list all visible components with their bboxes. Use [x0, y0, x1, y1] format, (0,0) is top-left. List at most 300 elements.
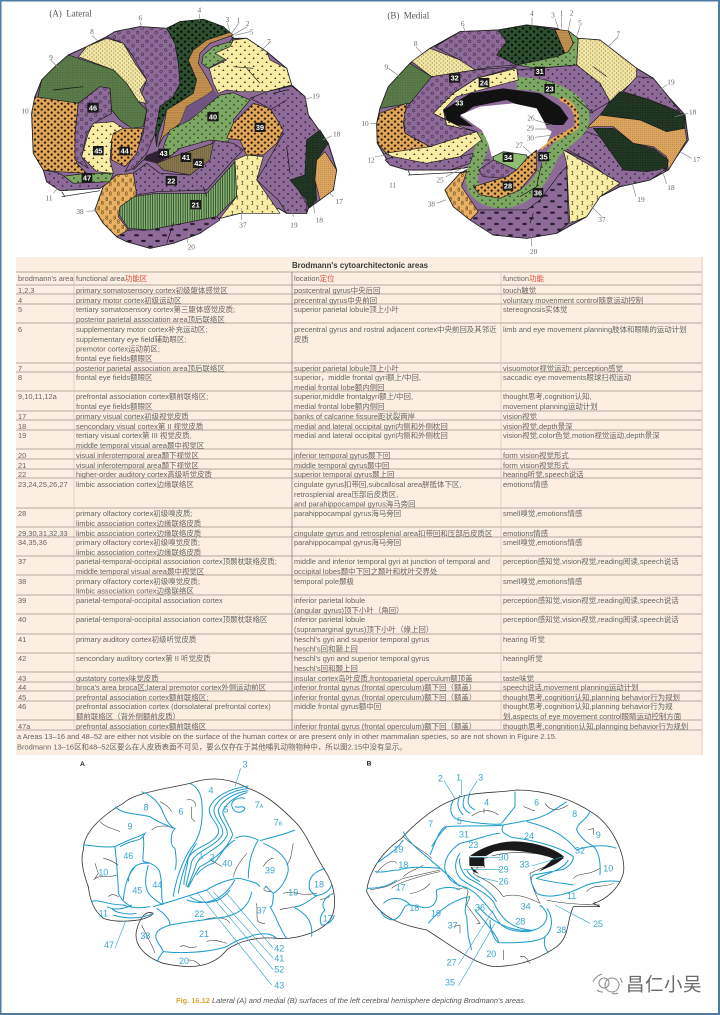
silhouette base — [377, 25, 688, 238]
area number labels: 10 — [98, 867, 108, 877]
area number labels — [21, 6, 343, 251]
header row: brodmann's area — [18, 274, 74, 283]
header row: location定位 — [294, 273, 335, 283]
table rows: prefrontal association cortex额前联络区 — [76, 721, 207, 731]
area number labels: 4 — [208, 786, 213, 796]
table rows: vision视觉,color色觉,motion视觉运动,depth景深 — [503, 430, 660, 440]
area number labels: 20 — [530, 247, 538, 256]
figure caption: Fig. 16.12 Lateral (A) and medial (B) surfaces of the left cerebral hemisphere depicting Brodmann's areas. — [176, 996, 526, 1005]
area number labels: 6 — [138, 14, 142, 23]
area number labels: 7B — [274, 818, 283, 828]
table footnote: Brodmann 13–16区和48–52区要么在人皮质表面不可见，要么仅存在于其他哺乳动物物种中，所以图2.15中没有显示。 — [17, 742, 407, 752]
table rows: inferior frontal gyrus (frontal operculum)额下回（额盖） — [294, 721, 476, 731]
area number labels: 10 — [361, 119, 369, 128]
region 18 upper — [600, 92, 685, 132]
numbered boxes — [449, 67, 555, 197]
table rows: 40 — [18, 615, 26, 624]
area number labels: 22 — [194, 909, 204, 919]
table rows: parietal-temporal-occipital association cortex — [76, 596, 223, 605]
region 10 — [377, 103, 430, 153]
region 11 — [385, 153, 473, 170]
table rows: supplementary eye field辅助眼区; — [76, 334, 186, 344]
sulci — [408, 67, 607, 223]
table rows: parahippocampal gyrus海马旁回 — [294, 508, 401, 518]
region 40 — [163, 93, 250, 157]
area number labels: 31 — [459, 829, 469, 839]
area number labels: 4 — [484, 798, 489, 808]
region 4 — [155, 19, 230, 147]
region 43 — [143, 150, 170, 163]
area number labels: 37 — [257, 906, 267, 916]
silhouette base — [32, 19, 337, 248]
region 24 — [433, 68, 518, 132]
area number labels: 38 — [428, 200, 435, 209]
table: Brodmann's cytoarchitectonic areas — [16, 257, 703, 755]
table rows: emotions情感 — [503, 479, 549, 489]
area number labels: 8 — [90, 27, 94, 36]
table rows: temporal pole颞极 — [294, 576, 355, 586]
region 8 — [78, 38, 147, 103]
table rows: visual inferotemporal area颞下视觉区 — [76, 460, 199, 470]
region 18 lower — [593, 128, 668, 172]
table rows: visuomotor视觉运动; perception感觉 — [503, 363, 623, 373]
central white cavity — [473, 853, 563, 903]
area number labels: 17 — [323, 913, 333, 923]
area number labels: 20 — [188, 242, 195, 251]
numbered boxes: 23 — [546, 84, 554, 93]
area number labels: 19 — [312, 92, 320, 101]
table title: Brodmann's cytoarchitectonic areas — [292, 261, 429, 270]
white callosum details — [463, 857, 493, 867]
table rows: supplementary motor cortex补充运动区; — [76, 324, 207, 334]
numbered boxes: 43 — [160, 149, 168, 158]
table rows: heschl's回和颞上回 — [294, 644, 358, 654]
table rows: 22 — [18, 470, 26, 479]
area number labels: 2 — [246, 19, 250, 28]
table rows: 18 — [18, 422, 26, 431]
region 37 — [563, 150, 620, 223]
table rows: middle and inferior temporal gyri at junction of temporal and — [294, 557, 490, 566]
numbered boxes: 42 — [194, 159, 202, 168]
region 9 — [38, 55, 147, 128]
table rows: prefrontal association cortex额前联络区; — [76, 391, 208, 401]
area number labels: 39 — [265, 866, 275, 876]
table rows: 20 — [18, 451, 26, 460]
area number labels: 18 — [333, 130, 341, 139]
table rows: medial frontal lobe额内侧回 — [294, 401, 385, 411]
area number labels: 26 — [527, 114, 535, 123]
area number labels: 18 — [314, 879, 324, 889]
region 18 — [290, 130, 328, 208]
area number labels: 3 — [478, 773, 483, 783]
table rows: superior,middle frontalgyri额上/中回, — [294, 391, 413, 401]
header row: functional area功能区 — [76, 273, 148, 283]
table rows: limbic association cortex边缘联络区 — [76, 586, 194, 596]
table rows: primary visual cortex初级视觉皮质 — [76, 411, 189, 421]
area number labels: 38 — [76, 207, 84, 216]
region 5 — [517, 31, 578, 68]
panel letter B: B — [367, 761, 372, 768]
table rows: middle temporal gyrus颞中回 — [294, 460, 389, 470]
table rows: primary olfactory cortex初级嗅觉皮质; — [76, 576, 200, 586]
numbered boxes: 36 — [534, 188, 542, 197]
table rows: parietal-temporal-occipital association cortex顶颞枕联络区 — [76, 614, 268, 624]
table rows: 42 — [18, 654, 26, 663]
table rows: 9,10,11,12a — [18, 392, 58, 401]
table rows: 5 — [18, 305, 22, 314]
region 44 — [112, 128, 143, 167]
table rows: inferior parietal lobule — [294, 615, 365, 624]
table rows: vision视觉,depth景深 — [503, 421, 573, 431]
area number labels: 33 — [519, 859, 529, 869]
area number labels: 1 — [560, 8, 564, 17]
region 19 upper — [623, 77, 680, 112]
table rows: 19 — [18, 431, 26, 440]
area number labels: 5 — [457, 816, 462, 826]
cingulate green band — [472, 83, 583, 202]
table rows: prefrontal association cortex额前联络区; — [76, 692, 208, 702]
region 34 — [493, 152, 528, 170]
table rows: smell嗅觉,emotions情感 — [503, 576, 583, 586]
header row — [18, 273, 544, 283]
table rows: gustatory cortex味觉皮质 — [76, 673, 159, 683]
table rows: premotor cortex运动前区; — [76, 344, 160, 354]
area number labels: 36 — [475, 902, 485, 912]
table footnote: a Areas 13–16 and 48–52 are either not visible on the surface of the human cortex or are present only in other mammalian species, so are not shown in Figure 2.15. — [17, 732, 557, 741]
area number labels: 35 — [445, 978, 455, 988]
table rows: 43 — [18, 674, 26, 683]
table rows: inferior parietal lobule — [294, 596, 365, 605]
table rows: hearing听觉,speech说话 — [503, 469, 584, 479]
region 9 — [380, 63, 432, 108]
table rows: hearing听觉 — [503, 653, 543, 663]
area number labels: 3 — [551, 10, 555, 19]
area number labels: 6 — [534, 798, 539, 808]
area leader lines — [370, 17, 692, 247]
area number labels: 8 — [414, 39, 418, 48]
region 38 — [445, 172, 478, 220]
brain diagram B: coloured medial surface — [361, 8, 701, 256]
table rows: medial frontal lobe额内侧回 — [294, 382, 385, 392]
area number labels: 38 — [140, 931, 150, 941]
area number labels: 1 — [237, 16, 241, 25]
area number labels: 7 — [616, 30, 620, 39]
area number labels: 25 — [593, 919, 603, 929]
table rows: primary auditory cortex初级听觉皮质 — [76, 634, 197, 644]
table rows: primary motor cortex初级运动区 — [76, 295, 182, 305]
numbered boxes: 24 — [480, 78, 489, 87]
white central cavity — [460, 103, 552, 157]
table rows: sencondary visual cortex第 II 视觉皮质 — [76, 421, 204, 431]
corpus callosum — [469, 841, 564, 874]
table rows: 46 — [18, 702, 26, 711]
region 6 — [435, 30, 517, 70]
sulcal branches — [93, 800, 330, 965]
numbered boxes: 45 — [94, 146, 102, 155]
area number labels: 10 — [603, 864, 613, 874]
brain outline — [82, 779, 335, 967]
table rows: heschl's gyri and superior temporal gyrus — [294, 654, 430, 663]
table rows: 28 — [18, 509, 26, 518]
table rows: 38 — [18, 577, 26, 586]
header row: function功能 — [503, 273, 544, 283]
table rows: smell嗅觉,emotions情感 — [503, 508, 583, 518]
area number labels: 32 — [575, 846, 585, 856]
region 21 — [118, 162, 237, 230]
table rows: 1,2,3 — [18, 286, 35, 295]
table rows: movement planning运动计划 — [503, 401, 598, 411]
region 10 — [32, 97, 87, 173]
leader lines — [115, 768, 273, 985]
area number labels: 46 — [123, 851, 133, 861]
table rows: retrosplenial area压部后皮质区, — [294, 489, 398, 499]
table rows: visual inferotemporal area颞下视觉区 — [76, 450, 199, 460]
region 20 — [470, 167, 568, 238]
numbered boxes: 32 — [451, 74, 459, 83]
area number labels: 9 — [127, 822, 132, 832]
table rows: banks of calcarine fissure距状裂两岸 — [294, 411, 416, 421]
table rows: medial and lateral occipital gyri内侧和外侧枕回 — [294, 430, 448, 440]
sulcal branches — [370, 803, 613, 963]
area number labels: 7A — [255, 800, 264, 810]
numbered boxes: 33 — [455, 98, 463, 107]
table rows: form vision视觉形式 — [503, 450, 569, 460]
table rows: inferior frontal gyrus (frontal operculum)额下回（额盖） — [294, 692, 476, 702]
table rows: 44 — [18, 683, 26, 692]
area number labels: 19 — [667, 78, 675, 87]
area number labels: 19 — [290, 220, 298, 229]
area number labels: 11 — [45, 194, 53, 203]
table rows: thought思考,cognition认知,planning behavior行为规 — [503, 701, 673, 711]
table rows: 皮质 — [294, 334, 309, 344]
area number labels: 4 — [197, 6, 201, 15]
numbered boxes — [82, 103, 265, 209]
table rows: 37 — [18, 557, 26, 566]
table rows: limbic association cortex边缘联络皮质 — [76, 547, 202, 557]
table rows: stereognosis实体觉 — [503, 304, 568, 314]
area number labels: 19 — [637, 195, 645, 204]
table rows: primary olfactory cortex初级嗅皮质; — [76, 508, 193, 518]
area number labels: 4 — [530, 9, 534, 18]
area number labels: 20 — [179, 956, 189, 966]
table rows: taste味觉 — [503, 673, 535, 683]
table rows: 45 — [18, 693, 26, 702]
table rows — [18, 285, 688, 731]
numbered boxes: 46 — [89, 103, 97, 112]
table rows: emotions情感 — [503, 528, 549, 538]
region 4 — [497, 25, 565, 65]
area number labels: 10 — [21, 106, 29, 115]
table rows: precentral gyrus and rostral adjacent cortex中央前回及其邻近 — [294, 324, 497, 334]
region 22 — [133, 140, 243, 195]
area number labels: 9 — [596, 830, 601, 840]
table rows: frontal eye fields额眼区 — [76, 353, 153, 363]
area number labels: 20 — [486, 949, 496, 959]
table background — [16, 257, 703, 755]
region 3 1 2 — [555, 29, 573, 53]
table rows: smell嗅觉,emotions情感 — [503, 537, 583, 547]
table rows: heschl's回和颞上回 — [294, 664, 358, 673]
area number labels: 29 — [499, 864, 509, 874]
area number labels: 18 — [409, 903, 419, 913]
blue area borders — [83, 783, 334, 962]
region 31 — [517, 65, 610, 113]
area number labels: 1 — [198, 850, 203, 860]
area leader lines — [31, 14, 333, 243]
area number labels: 3 — [242, 759, 247, 769]
region 19 lower — [565, 132, 667, 187]
table rows: thought思考,cognition认知,planning behavior行为规划 — [503, 692, 680, 702]
table rows: cingulate gyrus扣带回,subcallosal area胼胝体下区, — [294, 479, 461, 489]
region 28 — [473, 150, 537, 198]
area number labels: 24 — [524, 831, 534, 841]
table rules — [16, 272, 702, 730]
table rows: frontal eye fields额眼区 — [76, 372, 153, 382]
numbered boxes: 41 — [182, 153, 190, 162]
region 46 — [75, 87, 112, 168]
region 5 — [202, 37, 233, 68]
area number labels: 3 — [225, 15, 229, 24]
table rows: 4 — [18, 296, 22, 305]
area number labels: 12 — [367, 156, 375, 165]
table rows: (supramarginal gyrus)顶下小叶（缘上回） — [294, 624, 433, 634]
table rows: vision视觉 — [503, 411, 537, 421]
table rows: 21 — [18, 461, 26, 470]
region 12 — [385, 132, 482, 163]
table rows: middle temporal visual area颞中视觉区 — [76, 440, 205, 450]
table rows: middle frontal gyrus额中回 — [294, 701, 381, 711]
table rows: 8 — [18, 373, 22, 382]
table rows: voluntary movenment control随意运动控制 — [503, 295, 643, 305]
area number labels: 2 — [438, 773, 443, 783]
region 34 purple — [478, 160, 517, 178]
region 45 — [82, 122, 123, 173]
region 17 — [315, 152, 337, 200]
region 8 — [412, 48, 475, 77]
table rows: limbic association cortex边缘联络皮质 — [76, 528, 202, 538]
retrosplenial orange band — [540, 98, 577, 148]
area number labels: 44 — [152, 880, 162, 890]
table rows: parietal-temporal-occipital association cortex顶颞枕联络皮质; — [76, 556, 277, 566]
table rows: 23,24,25,26,27 — [18, 480, 68, 489]
area number labels: 7 — [428, 819, 433, 829]
area number labels: 5 — [250, 28, 254, 37]
table rows: form vision视觉形式 — [503, 460, 569, 470]
table rows: higher-order auditory cortex高级听觉皮质 — [76, 469, 213, 479]
table rows: touch触觉 — [503, 285, 537, 295]
numbered boxes: 28 — [504, 182, 512, 191]
area number labels: 17 — [396, 883, 406, 893]
region 38 — [95, 173, 137, 237]
table rows: perception感知觉,vision视觉,reading阅读,speech说话 — [503, 556, 679, 566]
region 39 — [227, 103, 283, 155]
area number labels: 19 — [431, 908, 441, 918]
area number labels: 11 — [567, 891, 576, 901]
table rows: prefrontal association cortex (dorsolateral prefrontal cortex) — [76, 702, 271, 711]
area number labels: 2 — [570, 8, 574, 17]
area number labels: 9 — [49, 53, 53, 62]
table rows: (angular gyrus)顶下小叶（角回） — [294, 605, 404, 615]
area number labels — [361, 8, 701, 256]
panel letter A: A — [80, 761, 85, 768]
numbered boxes: 31 — [536, 67, 544, 76]
area number labels: 34 — [521, 902, 531, 912]
table rows: 39 — [18, 596, 26, 605]
numbered boxes: 21 — [192, 200, 200, 209]
numbered boxes: 34 — [504, 153, 513, 162]
area number labels: 19 — [393, 844, 403, 854]
table rows: thougth思考,congnition认知,plannging behavior行为规划 — [503, 721, 688, 731]
table rows: heschl's gyri and superior temporal gyrus — [294, 635, 430, 644]
table rows: 7 — [18, 364, 22, 373]
area number labels: 23 — [468, 840, 478, 850]
regions 1 2 3 strip — [158, 32, 233, 147]
area number labels: 27 — [516, 140, 523, 149]
watermark: icon and account name — [593, 974, 702, 995]
watermark text: 昌仁小吴 — [626, 974, 702, 995]
region 6 — [107, 27, 180, 172]
regions 41 42 — [157, 143, 213, 175]
area number labels: 37 — [448, 920, 458, 930]
table rows: 29,30,31,32,33 — [18, 529, 68, 538]
table rows: posterior parietal association area顶后联络区 — [76, 314, 225, 324]
area number labels: 5 — [223, 804, 228, 814]
watermark icon — [593, 974, 622, 994]
table rows: 41 — [18, 635, 26, 644]
table rows: 额前联络区（背外侧额前皮质） — [76, 711, 180, 721]
table rows: parahippocampal gyrus海马旁回 — [294, 537, 401, 547]
table rows: 6 — [18, 325, 22, 334]
table rows: posterior parietal association area顶后联络区 — [76, 363, 225, 373]
area number labels: 11 — [389, 180, 397, 189]
area number labels: 18 — [398, 860, 408, 870]
area number labels: 37 — [598, 215, 606, 224]
table rows: frontal eye fields额眼区 — [76, 401, 153, 411]
area number labels: 19 — [288, 887, 298, 897]
area number labels: 27 — [447, 957, 457, 967]
region 20 — [117, 217, 220, 248]
label: (B) Medial: (B) Medial — [387, 10, 430, 20]
table rows: speech说话,movement planning运动计划 — [503, 682, 639, 692]
area number labels: 45 — [132, 886, 142, 896]
label: (A) Lateral: (A) Lateral — [49, 9, 92, 19]
table rows: hearing 听觉 — [503, 634, 545, 644]
area number labels: 6 — [178, 807, 183, 817]
area number labels: 30 — [499, 852, 509, 862]
area number labels: 30 — [527, 134, 534, 143]
table rows: sencondary auditory cortex第 II 听觉皮质 — [76, 653, 211, 663]
table rows: tertiary somatosensory cortex第三躯体感觉皮质; — [76, 304, 235, 314]
region 7 — [209, 38, 292, 93]
area number labels: 1 — [456, 773, 461, 783]
area number labels: 9 — [384, 63, 388, 72]
table rows: occipital lobes颞中下回之颞叶和枕叶交界处 — [294, 566, 438, 576]
area number labels: 6 — [461, 19, 465, 28]
brain outline — [367, 790, 624, 967]
table rows: precentral gyrus中央前回 — [294, 295, 377, 305]
region 47 — [60, 173, 113, 183]
table rows: limbic association cortex边缘联络区 — [76, 479, 194, 489]
table rows: superior temporal gyrus颞上回 — [294, 470, 394, 479]
area number labels: 17 — [693, 155, 701, 164]
area number labels: 28 — [515, 916, 525, 926]
table rows: saccadic eye movements眼球扫视运动 — [503, 372, 632, 382]
region 19 — [250, 86, 320, 213]
area number labels: 7 — [267, 37, 271, 46]
table rows: limb and eye movement planning肢体和眼睛的运动计划 — [503, 324, 687, 334]
region 7 — [577, 38, 637, 102]
leader lines — [444, 780, 590, 986]
